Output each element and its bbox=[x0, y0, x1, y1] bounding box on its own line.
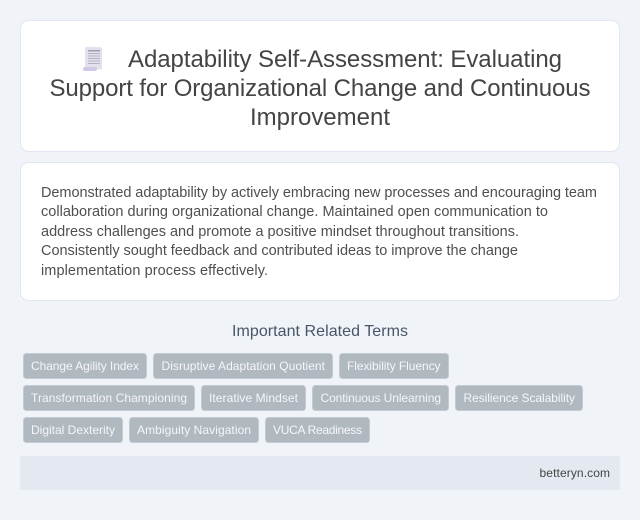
summary text: collaboration during organizational change. Maintained open communication to bbox=[41, 204, 548, 220]
tag: Flexibility Fluency bbox=[340, 354, 448, 378]
tag: Continuous Unlearning bbox=[312, 386, 448, 410]
tag: Digital Dexterity bbox=[24, 418, 122, 442]
title: Improvement bbox=[250, 104, 390, 131]
tag: Ambiguity Navigation bbox=[130, 418, 258, 442]
footer source text: betteryn.com bbox=[540, 466, 610, 480]
tag: Digital Dexterity: Digital Dexterity bbox=[31, 423, 115, 437]
summary text: Demonstrated adaptability by actively embracing new processes and encouraging team bbox=[41, 185, 597, 201]
icon: paper scroll bbox=[83, 46, 102, 71]
tag: Ambiguity Navigation: Ambiguity Navigation bbox=[137, 423, 251, 437]
summary text bbox=[41, 185, 597, 279]
tag: Disruptive Adaptation Quotient: Disruptive Adaptation Quotient bbox=[162, 359, 326, 373]
tag: Continuous Unlearning: Continuous Unlearning bbox=[320, 391, 441, 405]
tag: Disruptive Adaptation Quotient bbox=[154, 354, 332, 378]
summary text: implementation process effectively. bbox=[41, 263, 268, 279]
tag: Change Agility Index bbox=[24, 354, 146, 378]
related term tags bbox=[24, 354, 582, 442]
title: Support for Organizational Change and Continuous bbox=[50, 75, 590, 102]
panel: summary card bbox=[20, 162, 620, 300]
title: Adaptability Self-Assessment: Evaluating bbox=[128, 46, 562, 73]
summary text: address challenges and promote a positive mindset throughout transitions. bbox=[41, 224, 519, 240]
tag: Change Agility Index: Change Agility Index bbox=[31, 359, 139, 373]
tag: Resilience Scalability: Resilience Scalability bbox=[464, 391, 575, 405]
tag: Flexibility Fluency: Flexibility Fluency bbox=[347, 359, 440, 373]
tag: VUCA Readiness: VUCA Readiness bbox=[273, 423, 362, 437]
tag: Resilience Scalability bbox=[456, 386, 582, 410]
title bbox=[50, 46, 590, 131]
panel: title card bbox=[20, 20, 620, 152]
summary text: Consistently sought feedback and contributed ideas to improve the change bbox=[41, 243, 518, 259]
footer bbox=[20, 456, 620, 490]
tag: Transformation Championing: Transformation Championing bbox=[31, 391, 187, 405]
heading: related terms: Important Related Terms bbox=[232, 323, 408, 340]
tag: Iterative Mindset bbox=[202, 386, 306, 410]
tag: Iterative Mindset: Iterative Mindset bbox=[209, 391, 299, 405]
tag: VUCA Readiness bbox=[266, 418, 370, 442]
tag: Transformation Championing bbox=[24, 386, 194, 410]
